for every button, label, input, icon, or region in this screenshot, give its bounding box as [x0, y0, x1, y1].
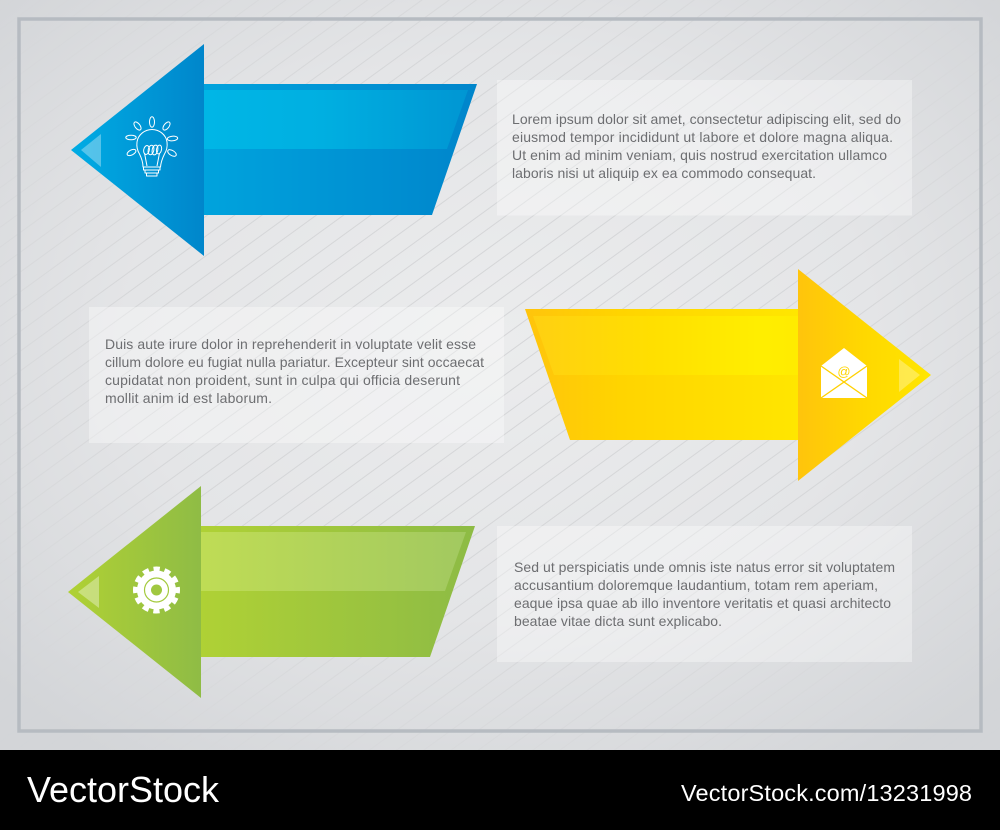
- text box: yellow: [89, 307, 504, 443]
- yellow band highlight: [533, 316, 798, 375]
- footer image id: VectorStock.com/13231998: [681, 780, 972, 806]
- text box: green: [497, 526, 912, 662]
- paragraph: Ut enim ad minim veniam, quis nostrud exercitation ullamco: [512, 147, 887, 163]
- paragraph: cupidatat non proident, sunt in culpa qui officia deserunt: [105, 372, 460, 388]
- paragraph: Sed ut perspiciatis unde omnis iste natus error sit voluptatem: [514, 559, 895, 575]
- box background: [497, 80, 912, 216]
- paragraph: mollit anim id est laborum.: [105, 390, 272, 406]
- paragraph: accusantium doloremque laudantium, totam rem aperiam,: [514, 577, 878, 593]
- green arrow head: [68, 486, 201, 698]
- paragraph: eiusmod tempor incididunt ut labore et dolore magna aliqua.: [512, 129, 893, 145]
- blue tip accent: [81, 134, 101, 167]
- green tip accent: [78, 576, 99, 608]
- diagonal stripe texture: [40, 0, 961, 684]
- panel: green arrow: [68, 486, 475, 698]
- yellow arrow band: [525, 309, 798, 440]
- blue arrow band: [204, 84, 477, 215]
- panel: blue arrow: [71, 44, 477, 256]
- icon: envelope: [821, 348, 867, 398]
- box background: [89, 307, 504, 443]
- yellow arrow head: [798, 269, 931, 481]
- paragraph: cillum dolore eu fugiat nulla pariatur. Excepteur sint occaecat: [105, 354, 484, 370]
- green arrow band: [201, 526, 475, 657]
- box background: [497, 526, 912, 662]
- panel: yellow arrow: [525, 269, 931, 481]
- footer bar: [0, 750, 1000, 830]
- footer logo text: VectorStock: [27, 769, 220, 810]
- paragraph: laboris nisi ut aliquip ex ea commodo consequat.: [512, 165, 816, 181]
- yellow tip accent: [899, 359, 920, 392]
- green band highlight: [201, 532, 466, 591]
- icon: envelope: @: [837, 364, 851, 379]
- blue arrow head: [71, 44, 204, 256]
- paragraph: Duis aute irure dolor in reprehenderit in voluptate velit esse: [105, 336, 476, 352]
- paragraph: eaque ipsa quae ab illo inventore veritatis et quasi architecto: [514, 595, 891, 611]
- icon: gear: [136, 569, 178, 611]
- paragraph: beatae vitae dicta sunt explicabo.: [514, 613, 722, 629]
- icon: light bulb: [126, 117, 178, 176]
- paragraph: Lorem ipsum dolor sit amet, consectetur adipiscing elit, sed do: [512, 111, 901, 127]
- blue band highlight: [204, 90, 468, 149]
- text box: blue: [497, 80, 912, 216]
